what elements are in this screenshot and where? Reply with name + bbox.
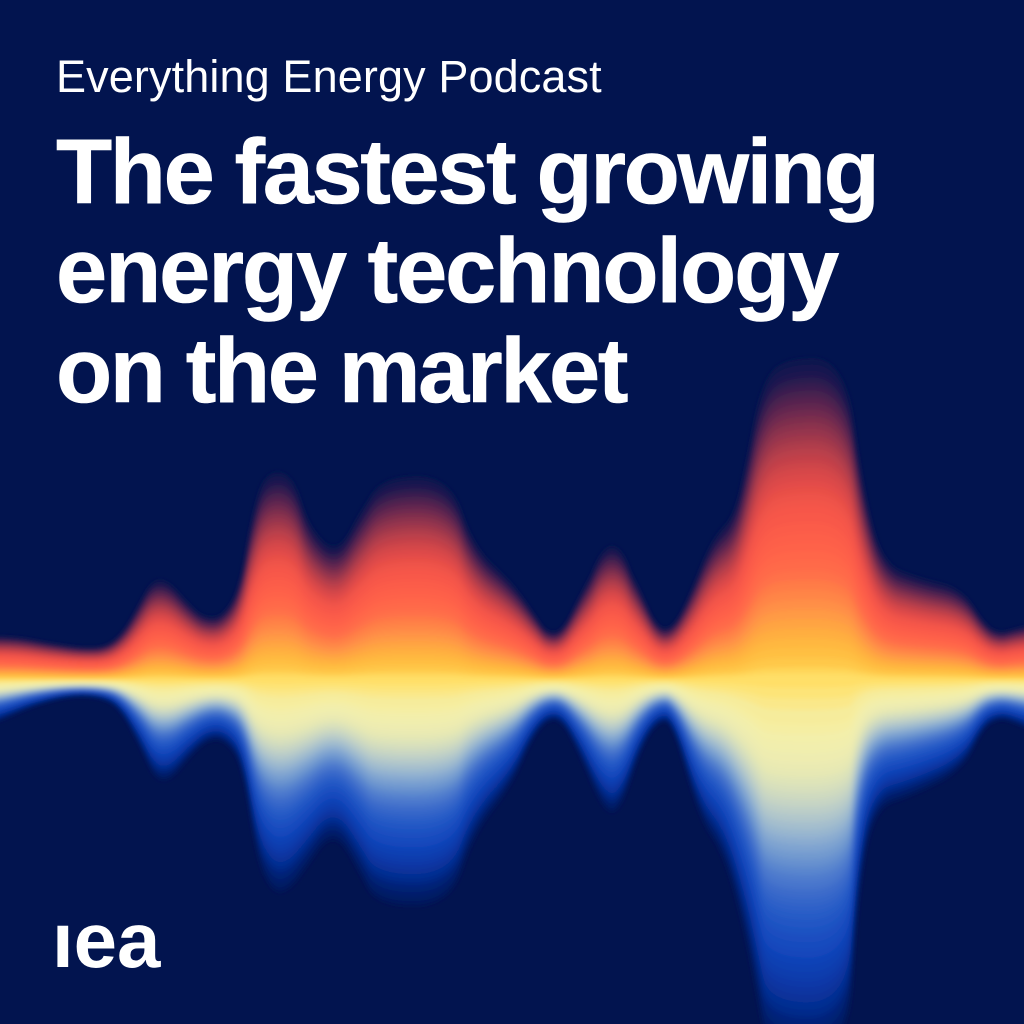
title	[56, 120, 877, 422]
red and orange upper half of waveform	[0, 358, 1024, 680]
subtitle: podcast name: Everything Energy Podcast	[56, 51, 602, 102]
blue lower half of waveform	[0, 680, 1024, 1024]
title: energy technology	[56, 220, 837, 322]
title: on the market	[56, 320, 626, 422]
title: The fastest growing	[56, 120, 877, 222]
